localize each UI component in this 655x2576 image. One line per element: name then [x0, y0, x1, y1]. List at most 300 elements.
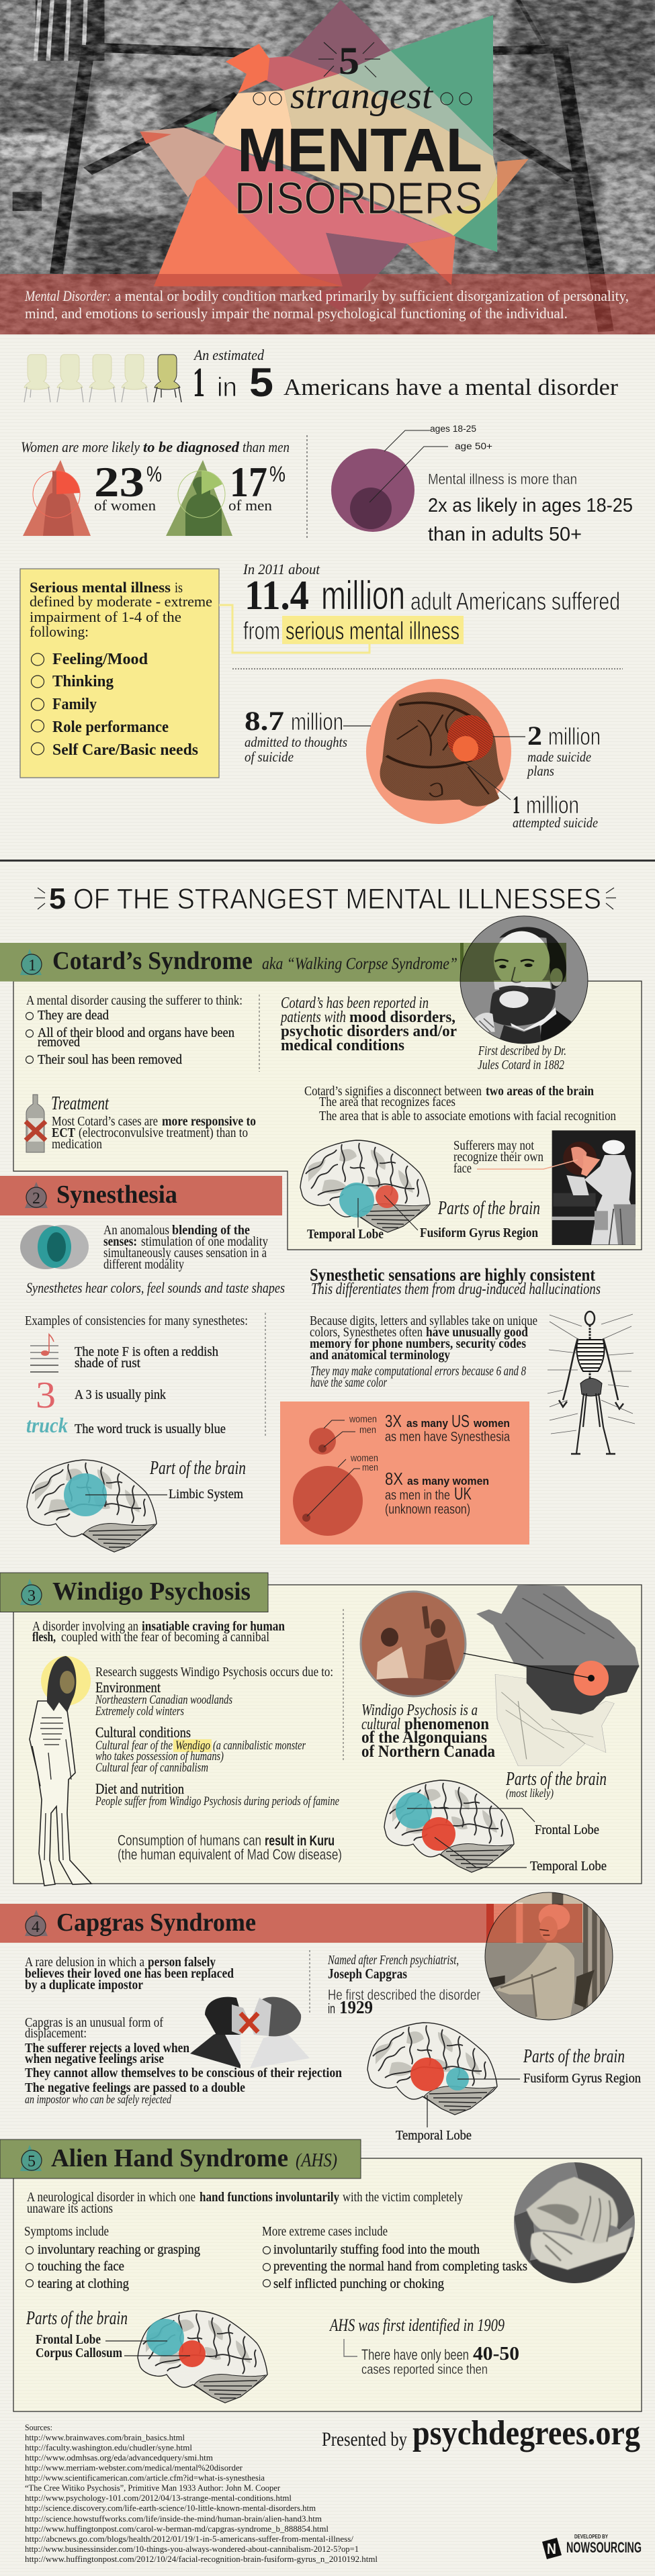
symptoms list: touching the face: [38, 2259, 124, 2274]
examples list: Examples of consistencies for many synesthetes:: [25, 1314, 248, 1328]
description: coupled with the fear of becoming a cannibal: [61, 1630, 269, 1645]
panel: serious mental illness definition: [20, 569, 219, 778]
panel: Cotard's Syndrome: [0, 913, 642, 1250]
examples list: A 3 is usually pink: [75, 1387, 166, 1402]
causes list: Environment: [95, 1679, 161, 1696]
extreme cases list: More extreme cases include: [262, 2224, 388, 2239]
portrait caption: [478, 1044, 566, 1072]
text: an estimated: An estimated: [193, 347, 265, 363]
definition: believes their loved one has been replaced: [25, 1966, 234, 1981]
number badge: 2: [32, 1190, 40, 1207]
red tint band: [0, 274, 655, 334]
reported patients text: medical conditions: [281, 1037, 404, 1054]
label temporal lobe: Temporal Lobe: [530, 1859, 607, 1874]
label ages 18-25: ages 18-25: [430, 423, 476, 434]
logo: nowsourcing: N: [547, 2540, 556, 2557]
stat 8X: UK: [454, 1483, 472, 1504]
icon: blue word truck: truck: [26, 1413, 68, 1437]
panel background: [13, 981, 642, 1250]
portrait of Jules Cotard: [457, 913, 591, 1048]
sources list: http://www.huffingtonpost.com/carol-w-berman-md/capgras-syndrome_b_888854.html: [25, 2524, 329, 2534]
number badge: [20, 2145, 42, 2171]
panel: gender stats: [21, 439, 290, 536]
chart: UK women vs men: [293, 1453, 378, 1536]
disconnect text: two areas of the brain: [486, 1084, 594, 1099]
sources list: http://www.brainwaves.com/brain_basics.html: [25, 2432, 185, 2442]
definition: person falsely: [148, 1955, 216, 1970]
panel: Synesthesia: [0, 1176, 635, 1552]
symptoms list: involuntary reaching or grasping: [38, 2242, 200, 2257]
description: flesh,: [32, 1630, 56, 1645]
causes list: Extremely cold winters: [95, 1704, 184, 1718]
label parts of the brain: Parts of the brain: [26, 2308, 128, 2329]
stat: 11.4 million: [219, 561, 620, 653]
number badge: 4: [32, 1919, 40, 1936]
title word disorders: DISORDERS: [234, 173, 482, 224]
consistent sensations heading: Synesthetic sensations are highly consistent: [310, 1265, 595, 1285]
sources list: http://www.businessinsider.com/10-things-you-always-wondered-about-cannibalism-2012-5?op=1: [25, 2544, 359, 2554]
label parts of the brain: (most likely): [506, 1786, 554, 1800]
illustration: brain with temporal lobe and fusiform gyrus: [300, 1140, 430, 1232]
definition text: [103, 1223, 268, 1272]
number badge: 1: [28, 957, 36, 974]
memory text: have the same color: [310, 1375, 387, 1390]
symptoms list: removed: [38, 1035, 80, 1050]
illustration: brain frontal and corpus callosum: [105, 2311, 267, 2403]
treatment text: [51, 1093, 256, 1152]
icon: man triangle 17 percent: [166, 460, 232, 536]
header photo and title: [0, 0, 655, 334]
treatment text: Most Cotard’s cases are: [52, 1114, 158, 1129]
panel background: [13, 2158, 642, 2411]
sources list: http://www.odmhsas.org/eda/advancedquery/smi.htm: [25, 2452, 213, 2463]
banner overlay on portrait: [486, 1904, 582, 1943]
description: A neurological disorder in which one: [27, 2190, 195, 2205]
heading: Windigo Psychosis: [52, 1577, 251, 1606]
sources list: http://faculty.washington.edu/chudler/syne.html: [25, 2442, 192, 2452]
named after text: in: [328, 2002, 335, 2017]
panel: gender ratio box: [280, 1401, 529, 1545]
title number: 5: [339, 39, 359, 83]
icon: overlapping eyes: [20, 1225, 89, 1269]
disconnect text: Cotard’s signifies a disconnect between: [304, 1084, 482, 1099]
number badge: 5: [28, 2153, 36, 2170]
treatment text: more responsive to: [162, 1114, 256, 1129]
label parts of the brain: Parts of the brain: [523, 2046, 625, 2067]
causes list: Cultural fear of cannibalism: [95, 1761, 208, 1775]
label limbic system: Limbic System: [169, 1487, 243, 1502]
sources list: Sources:: [25, 2422, 52, 2432]
percent sign: %: [269, 462, 286, 486]
stat: 1 in 5 chairs: [24, 347, 618, 406]
photo: kissing couple with red X: [190, 1997, 310, 2068]
stat 8.7 million: 8.7: [245, 706, 284, 736]
displacement list: They cannot allow themselves to be conscious of their rejection: [25, 2066, 342, 2080]
sepia photo of Algonquians: [359, 1590, 467, 1699]
displacement list: [25, 2015, 342, 2106]
stat 8.7 million: admitted to thoughts: [245, 734, 347, 750]
definition text: Mental Disorder:: [24, 287, 111, 304]
divider line: [309, 1950, 310, 2013]
heading: Synesthesia: [56, 1181, 177, 1209]
definition text: following:: [30, 623, 89, 640]
text block: than in adults 50+: [428, 524, 582, 545]
label part of the brain: Part of the brain: [149, 1458, 246, 1479]
causes list: Cultural fear of the: [95, 1739, 173, 1753]
displacement list: displacement:: [25, 2026, 87, 2041]
star of overlapping triangles: [140, 0, 529, 311]
stat 2 million: million: [548, 723, 601, 750]
displacement list: The negative feelings are passed to a double: [25, 2080, 245, 2095]
stat 8.7 million: million: [291, 708, 343, 735]
sources list: http://science.discovery.com/life-earth-science/10-little-known-mental-disorders.htm: [25, 2503, 316, 2513]
definition text: senses:: [103, 1234, 137, 1249]
named after text: Joseph Capgras: [328, 1966, 407, 1982]
divider line: [343, 1609, 344, 1760]
cases reported callout: 40-50: [473, 2344, 519, 2364]
cases reported callout: There have only been: [361, 2346, 469, 2363]
label fusiform gyrus region: Fusiform Gyrus Region: [420, 1226, 538, 1240]
illustration: brain temporal and fusiform: [367, 2023, 520, 2127]
illustration: brain frontal and temporal: [384, 1780, 535, 1872]
memory text: memory for phone numbers, security codes: [310, 1336, 526, 1351]
definition text: stimulation of one modality: [141, 1234, 268, 1249]
title rays: [318, 42, 380, 77]
definition text: a mental or bodily condition marked primarily by sufficient disorganization of personality,: [115, 287, 629, 304]
stat 8X: as men in the: [385, 1488, 450, 1503]
icon: woman triangle 23 percent: [23, 460, 91, 536]
extreme cases list: [262, 2224, 527, 2291]
logo: nowsourcing: [542, 2534, 642, 2559]
checklist: [31, 651, 198, 759]
causes list: Cultural conditions: [95, 1724, 191, 1741]
big number 1: 1: [193, 360, 205, 406]
heading: to be diagnosed: [143, 439, 240, 455]
kuru callout: result in Kuru: [265, 1833, 335, 1849]
section heading: 5 of the strangest mental illnesses: [0, 860, 655, 915]
icon: musical note: [30, 1334, 58, 1372]
kuru callout: Consumption of humans can: [118, 1832, 261, 1849]
definition text: [24, 287, 629, 322]
heading: Capgras Syndrome: [56, 1908, 256, 1937]
stat 8.7 million: [245, 706, 371, 765]
definition: by a duplicate impostor: [25, 1978, 143, 1992]
named after text: He first described the disorder: [328, 1986, 480, 2003]
description: A disorder involving an: [32, 1619, 138, 1634]
caption sufferers: face: [453, 1161, 472, 1176]
stat 2 million: [493, 721, 601, 779]
definition text: is: [175, 579, 183, 596]
stat 23 percent: 23: [94, 458, 144, 506]
checklist: Family: [52, 696, 97, 713]
memory text: They may make computational errors because 6 and 8: [310, 1364, 526, 1379]
kuru callout: [118, 1832, 342, 1863]
definition text: mind, and emotions to seriously impair the normal psychological functioning of the individual.: [25, 305, 568, 322]
stat 8X: [385, 1469, 489, 1517]
panel: Alien Hand Syndrome: [0, 2140, 642, 2411]
photo: woman at mirror: [477, 1130, 636, 1245]
reported patients text: psychotic disorders and/or: [281, 1023, 457, 1040]
causes list: Wendigo: [175, 1739, 210, 1753]
caption sufferers: [453, 1138, 543, 1176]
icon: pink three: 3: [36, 1375, 56, 1416]
symptoms list: tearing at clothing: [38, 2276, 129, 2291]
symptoms list: [26, 993, 243, 1067]
definition text: simultaneously causes sensation in a: [103, 1246, 267, 1260]
description: [32, 1619, 285, 1645]
memory text: colors, Synesthetes often: [310, 1325, 423, 1340]
reported patients text: patients with: [279, 1009, 346, 1026]
line two: serious mental illness: [286, 617, 460, 645]
checklist: Thinking: [52, 673, 114, 690]
treatment text: medication: [52, 1137, 102, 1152]
label corpus callosum: Corpus Callosum: [36, 2346, 122, 2360]
big number: 11.4: [245, 573, 309, 618]
reported patients text: [259, 995, 457, 1072]
displacement list: Capgras is an unusual form of: [25, 2015, 163, 2030]
treatment text: Treatment: [51, 1093, 110, 1114]
sources list: http://science.howstuffworks.com/life/inside-the-mind/human-brain/alien-hand3.htm: [25, 2514, 322, 2524]
label parts of the brain: Parts of the brain: [505, 1769, 607, 1790]
caption sufferers: Sufferers may not: [453, 1138, 534, 1153]
cultural phenomenon text: phenomenon: [404, 1715, 489, 1733]
stat 3X: women: [473, 1417, 510, 1430]
sources list: http://www.psychology-101.com/2012/04/13-strange-mental-conditions.html: [25, 2493, 292, 2503]
chart: UK women vs men: men: [362, 1462, 378, 1473]
banner: [0, 1176, 282, 1215]
disconnect text: The area that recognizes faces: [319, 1095, 455, 1109]
cases reported callout: cases reported since then: [361, 2362, 488, 2377]
stat 3X: as men have Synesthesia: [385, 1430, 511, 1444]
text block: Mental illness is more than: [428, 471, 577, 488]
treatment text: (electroconvulsive treatment) than to: [79, 1125, 248, 1140]
description: insatiable craving for human: [142, 1619, 285, 1634]
sources list: “The Cree Witiko Psychosis”, Primitive Man 1933 Author: John M. Cooper: [25, 2483, 281, 2493]
panel background: [13, 1585, 642, 1884]
named after text: Named after French psychiatrist,: [327, 1953, 459, 1968]
extreme cases list: involuntarily stuffing food into the mouth: [273, 2242, 480, 2257]
photo: abandoned building with frame: [0, 0, 655, 334]
disconnect text: [304, 1084, 616, 1123]
line two: [243, 617, 460, 645]
chart: UK women vs men: women: [350, 1453, 378, 1464]
title ornaments: [253, 93, 472, 105]
heading: Women are more likely: [21, 439, 140, 455]
map of North America: [476, 1585, 640, 1766]
named after text: 1929: [339, 1997, 373, 2017]
label parts of the brain: [505, 1769, 607, 1800]
illustration: skeleton: [548, 1312, 635, 1454]
icon: crossed bottle: [26, 1095, 46, 1152]
label parts of the brain: Parts of the brain: [437, 1198, 540, 1219]
definition text: Serious mental illness: [30, 579, 171, 596]
sources list: [25, 2422, 378, 2564]
banner: [0, 1573, 268, 1612]
stat 1 million: 1: [513, 791, 520, 819]
description: with the victim completely: [343, 2190, 463, 2205]
banner overlay on portrait: [460, 943, 566, 982]
portrait caption: Jules Cotard in 1882: [478, 1058, 564, 1072]
sources list: http://www.huffingtonpost.com/2012/10/24/facial-recognition-brain-fusiform-gyrus_n_2010192.html: [25, 2554, 378, 2564]
stat 8.7 million: of suicide: [245, 749, 294, 765]
sources list: http://www.scientificamerican.com/article.cfm?id=what-is-synesthesia: [25, 2473, 265, 2483]
stat 3X: as many: [406, 1417, 448, 1430]
sources list: http://www.merriam-webster.com/medical/mental%20disorder: [25, 2463, 243, 2473]
memory text: and anatomical terminology: [310, 1348, 450, 1363]
portrait caption: First described by Dr.: [478, 1044, 566, 1058]
text: Americans have a mental disorder: Americans have a mental disorder: [283, 374, 618, 400]
banner: [0, 1904, 494, 1943]
extreme cases list: self inflicted punching or choking: [273, 2276, 444, 2291]
symptoms list: Symptoms include: [24, 2224, 109, 2239]
cultural phenomenon text: cultural: [361, 1716, 400, 1733]
checklist: Role performance: [52, 719, 169, 736]
section heading: 5 of the strangest mental illnesses: OF THE STRANGEST MENTAL ILLNESSES: [73, 883, 601, 915]
symptoms list: [24, 2224, 200, 2291]
cases reported callout: [344, 2339, 519, 2377]
illustration: head in circle: [366, 679, 511, 824]
stat 8X: (unknown reason): [385, 1502, 470, 1517]
stat 1 million: million: [526, 791, 579, 819]
stat 8X: 8X: [385, 1469, 403, 1489]
text block: [428, 471, 633, 545]
chart: US women vs men: men: [359, 1424, 376, 1436]
caption sufferers: recognize their own: [453, 1150, 543, 1164]
label frontal lobe: Frontal Lobe: [36, 2332, 101, 2347]
displacement list: The sufferer rejects a loved when: [25, 2041, 189, 2056]
stat 3X: 3X: [385, 1411, 402, 1431]
stat 2 million: made suicide: [527, 749, 591, 765]
definition text: An anomalous: [103, 1223, 169, 1238]
definition text: blending of the: [172, 1223, 250, 1238]
symptoms list: All of their blood and organs have been: [38, 1025, 234, 1040]
extreme cases list: preventing the normal hand from completing tasks: [273, 2259, 527, 2274]
stat 3X: [385, 1411, 511, 1444]
subheading: (AHS): [296, 2150, 337, 2171]
reported patients text: mood disorders,: [349, 1009, 455, 1026]
title word strangest: strangest: [290, 75, 433, 117]
kuru callout: (the human equivalent of Mad Cow disease): [118, 1846, 342, 1863]
heading: than men: [243, 439, 290, 455]
stat 17 percent: 17: [230, 458, 267, 506]
stat 2 million: plans: [526, 763, 554, 779]
checklist: Feeling/Mood: [52, 651, 148, 668]
definition text: defined by moderate - extreme: [30, 593, 212, 610]
percent sign: %: [146, 462, 162, 486]
banner: [0, 2140, 361, 2178]
portrait of Joseph Capgras: [485, 1892, 613, 2020]
cultural phenomenon text: of Northern Canada: [361, 1743, 495, 1761]
word million: million: [321, 573, 405, 618]
stat 1 million: [513, 791, 598, 831]
chart: US women vs men: women: [349, 1414, 377, 1425]
tagline: Synesthetes hear colors, feel sounds and taste shapes: [26, 1279, 285, 1296]
cultural phenomenon text: of the Algonquians: [361, 1729, 487, 1747]
banner: [0, 943, 464, 982]
symptoms list: A mental disorder causing the sufferer to think:: [26, 993, 243, 1008]
definition: [25, 1955, 234, 1992]
stat: suicide figures with head engraving: [232, 669, 623, 831]
checklist: Self Care/Basic needs: [52, 741, 198, 759]
treatment text: ECT: [52, 1125, 76, 1140]
symptoms list: They are dead: [38, 1008, 109, 1023]
photo: hand in circle: [514, 2162, 635, 2283]
stat 3X: US: [451, 1411, 470, 1431]
label temporal lobe: Temporal Lobe: [396, 2128, 472, 2143]
label fusiform gyrus region: Fusiform Gyrus Region: [523, 2071, 641, 2086]
number badge: 3: [28, 1588, 36, 1605]
examples list: [25, 1313, 265, 1437]
label frontal lobe: Frontal Lobe: [535, 1823, 599, 1837]
line two: from: [243, 617, 280, 645]
icon: five chairs: [24, 355, 181, 402]
map locator: [464, 1653, 609, 1696]
number badge: [20, 1579, 42, 1605]
chart: US women vs men: [309, 1414, 377, 1455]
named after text: [327, 1953, 480, 2017]
examples list: The note F is often a reddish: [75, 1344, 218, 1359]
panel: age stats: [307, 423, 633, 545]
causes list: People suffer from Windigo Psychosis during periods of famine: [95, 1794, 339, 1808]
presented by: Presented by: [322, 2428, 407, 2450]
title word mental: MENTAL: [237, 116, 482, 185]
causes list: (a cannibalistic monster: [213, 1739, 306, 1753]
first identified text: AHS was first identified in 1909: [329, 2315, 505, 2335]
memory text: have unusually good: [426, 1325, 528, 1340]
causes list: Diet and nutrition: [95, 1780, 184, 1797]
logo: nowsourcing: DEVELOPED BY: [574, 2534, 609, 2540]
examples list: The word truck is usually blue: [75, 1422, 226, 1436]
lead in: In 2011 about: [243, 561, 320, 578]
number badge: [20, 949, 42, 975]
section heading: 5 of the strangest mental illnesses: 5: [49, 882, 66, 915]
cultural phenomenon text: [361, 1702, 495, 1761]
displacement list: an impostor who can be safely rejected: [25, 2092, 172, 2106]
label temporal lobe: Temporal Lobe: [307, 1227, 384, 1242]
presented by: [322, 2414, 640, 2452]
label of women: of women: [94, 497, 156, 514]
highlight and connector: [219, 605, 464, 653]
stat 8X: as many women: [407, 1475, 489, 1487]
heading: Alien Hand Syndrome: [51, 2144, 288, 2172]
chart: nested age circles: [307, 430, 448, 539]
heading: [21, 439, 290, 455]
description: hand functions involuntarily: [200, 2190, 339, 2205]
causes list: who takes possession of humans): [95, 1749, 224, 1763]
consistent sensations heading: [310, 1265, 601, 1298]
memory text: [310, 1314, 537, 1390]
text: in: in: [217, 373, 237, 402]
definition text: different modality: [103, 1257, 184, 1272]
illustration: gaunt figure: [30, 1656, 91, 1886]
reported patients text: Cotard’s has been reported in: [281, 995, 429, 1012]
sources list: http://abcnews.go.com/blogs/health/2012/01/19/1-in-5-americans-suffer-from-mental-illness/: [25, 2534, 353, 2544]
stat 1 million: attempted suicide: [513, 815, 598, 831]
memory text: Because digits, letters and syllables take on unique: [310, 1314, 537, 1328]
causes list: Research suggests Windigo Psychosis occurs due to:: [95, 1665, 333, 1680]
label age 50+: age 50+: [455, 441, 492, 451]
heading: Cotard’s Syndrome: [52, 947, 253, 975]
definition text: impairment of 1-4 of the: [30, 608, 181, 625]
examples list: shade of rust: [75, 1356, 140, 1371]
definition text: [30, 579, 212, 640]
description: [27, 2190, 463, 2216]
panel: Capgras Syndrome: [0, 1887, 641, 2143]
description: unaware its actions: [27, 2201, 113, 2216]
label of men: of men: [228, 497, 272, 514]
causes list: [95, 1665, 339, 1808]
big number 5: 5: [249, 360, 273, 405]
